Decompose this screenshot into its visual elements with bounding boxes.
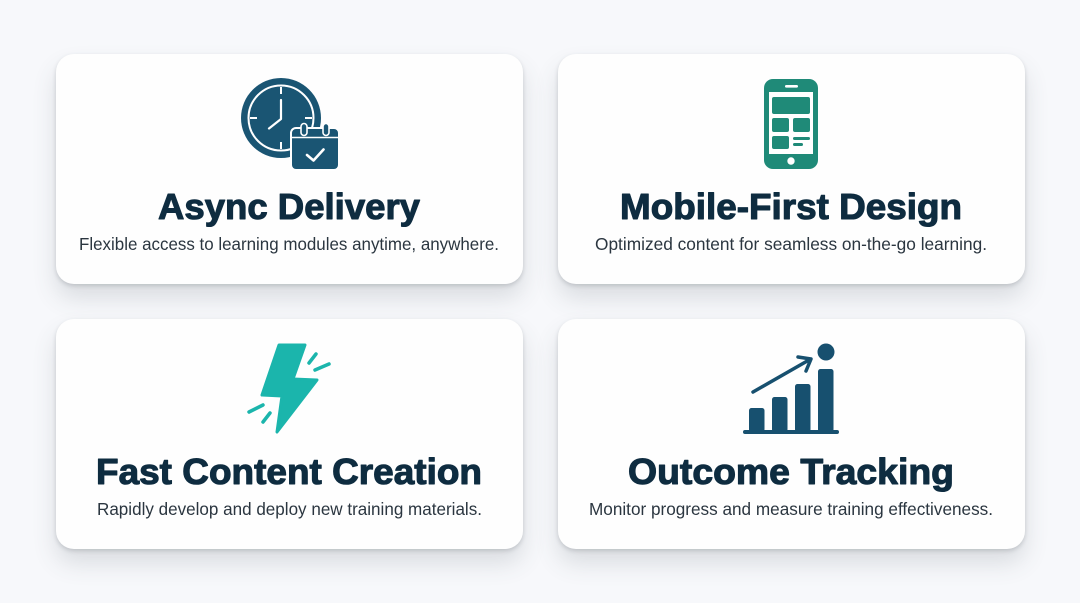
description: Optimized content for seamless on-the-go learning. bbox=[595, 234, 987, 254]
heading: Outcome Tracking bbox=[628, 451, 954, 492]
heading: Fast Content Creation bbox=[96, 451, 482, 492]
panel: async delivery bbox=[56, 54, 523, 284]
icon: smartphone bbox=[764, 79, 818, 169]
panel: mobile-first design bbox=[558, 54, 1025, 284]
heading: Async Delivery bbox=[158, 186, 420, 227]
description: Monitor progress and measure training effectiveness. bbox=[589, 499, 993, 519]
panel: fast content creation bbox=[56, 319, 523, 549]
description: Flexible access to learning modules anytime, anywhere. bbox=[79, 234, 499, 254]
description: Rapidly develop and deploy new training materials. bbox=[97, 499, 482, 519]
icon: growth bar chart bbox=[743, 344, 839, 434]
icon: lightning bolt bbox=[249, 345, 329, 432]
icon: clock and calendar bbox=[241, 78, 339, 170]
heading: Mobile-First Design bbox=[620, 186, 962, 227]
panel: outcome tracking bbox=[558, 319, 1025, 549]
